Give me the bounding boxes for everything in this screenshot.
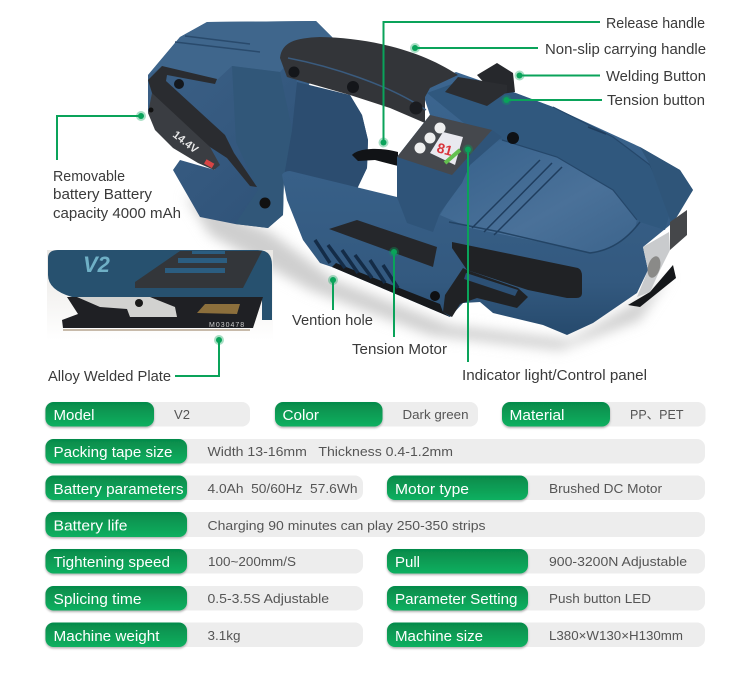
spec: battery life	[45, 512, 705, 537]
spec: battery parameters: 4.0Ah 50/60Hz 57.6Wh	[208, 481, 358, 496]
carrying handle grip	[280, 37, 458, 123]
label: battery: battery Battery	[53, 186, 153, 203]
leader: carrying handle	[410, 43, 538, 53]
trigger lever	[352, 149, 398, 166]
leader: alloy plate	[175, 335, 224, 376]
black frame	[148, 66, 257, 187]
spec: machine size	[387, 622, 705, 647]
spec: material	[502, 402, 706, 426]
spec: splicing time: Splicing time	[54, 591, 142, 608]
inset photo: alloy welded plate	[47, 250, 273, 340]
vent slots	[315, 240, 398, 288]
label: welding button: Welding Button	[606, 68, 706, 85]
spec: color: Color	[282, 407, 319, 424]
tension push button	[445, 77, 507, 106]
spec: motor type: Motor type	[395, 481, 469, 498]
spec: machine weight: 3.1kg	[208, 628, 240, 643]
leader: indicator light	[463, 144, 473, 362]
spec: pull	[387, 549, 705, 574]
spec: model: V2	[174, 407, 190, 422]
spec: pull: Pull	[395, 554, 420, 571]
grooves	[472, 127, 606, 235]
spec: material: Material	[510, 407, 564, 424]
spec: tightening speed	[45, 549, 363, 574]
leader: release handle	[378, 22, 600, 148]
leader: vention hole	[328, 275, 338, 310]
spec: battery life: Charging 90 minutes can play 250-350 strips	[208, 518, 486, 533]
spec: machine weight	[45, 622, 363, 647]
leader: tension motor	[389, 247, 399, 337]
spec: tightening speed: Tightening speed	[54, 554, 170, 571]
spec: color: Dark green	[402, 407, 468, 422]
label: battery: Removable	[53, 168, 125, 185]
label: tension motor: Tension Motor	[352, 341, 447, 358]
spec: parameter setting	[387, 586, 705, 610]
rear housing	[148, 21, 368, 228]
battery	[148, 93, 220, 170]
display bar	[445, 150, 460, 163]
spec: tightening speed: 100~200mm/S	[208, 554, 296, 569]
leader: tension button	[502, 95, 602, 105]
spec: model: Model	[54, 407, 94, 424]
control panel face	[397, 115, 492, 175]
front housing	[282, 72, 693, 335]
product photo: strapping tool: 81	[435, 139, 455, 159]
product photo: strapping tool	[148, 21, 693, 335]
spec: battery parameters: Battery parameters	[54, 481, 184, 498]
leader: welding button	[514, 70, 600, 80]
spec: battery life: Battery life	[54, 518, 128, 534]
side hole	[507, 132, 519, 144]
spec: color	[275, 402, 478, 426]
plate serial: M030478	[209, 322, 245, 329]
top cover	[440, 140, 637, 252]
label: battery: capacity 4000 mAh	[53, 205, 181, 222]
ridge band	[427, 80, 672, 230]
label: tension button: Tension button	[607, 92, 705, 109]
digital display	[430, 132, 463, 165]
label: release handle: Release handle	[606, 15, 705, 32]
spec: battery parameters	[45, 476, 363, 500]
battery label: 14.4V	[170, 129, 201, 156]
spec: pull: 900-3200N Adjustable	[549, 554, 687, 569]
spec: machine weight: Machine weight	[54, 628, 160, 645]
spec: motor type: Brushed DC Motor	[549, 481, 663, 496]
spec: machine size: Machine size	[395, 628, 483, 645]
spec: splicing time	[45, 586, 363, 610]
welding knob	[477, 63, 515, 95]
spec: motor type	[387, 476, 705, 500]
label: alloy welded plate: Alloy Welded Plate	[48, 368, 171, 385]
spec: model	[45, 402, 250, 426]
label: battery	[53, 168, 181, 222]
black side bars	[452, 242, 582, 298]
control panel box	[397, 115, 502, 232]
label: non-slip handle: Non-slip carrying handle	[545, 41, 706, 58]
panel buttons	[434, 122, 446, 134]
label: indicator light: Indicator light/Control panel	[462, 367, 647, 384]
label: vention hole: Vention hole	[292, 312, 373, 329]
leader: battery	[57, 111, 146, 160]
V2 mark: V2	[83, 252, 111, 277]
spec: packing tape size: Packing tape size	[54, 444, 172, 461]
machine shadow	[185, 195, 670, 350]
battery indicator	[204, 159, 214, 168]
spec: packing tape size: Width 13-16mm Thickness 0.4-1.2mm	[208, 444, 453, 459]
spec: parameter setting: Parameter Setting	[395, 591, 518, 608]
spec: splicing time: 0.5-3.5S Adjustable	[208, 591, 329, 606]
spec: packing tape size	[45, 439, 705, 464]
spec: parameter setting: Push button LED	[549, 591, 651, 606]
spec: material: PP、PET	[630, 407, 684, 422]
nose top	[640, 147, 693, 225]
carrying handle collar	[275, 40, 330, 92]
spec: machine size: L380×W130×H130mm	[549, 628, 683, 643]
nose metal plate	[637, 232, 670, 297]
